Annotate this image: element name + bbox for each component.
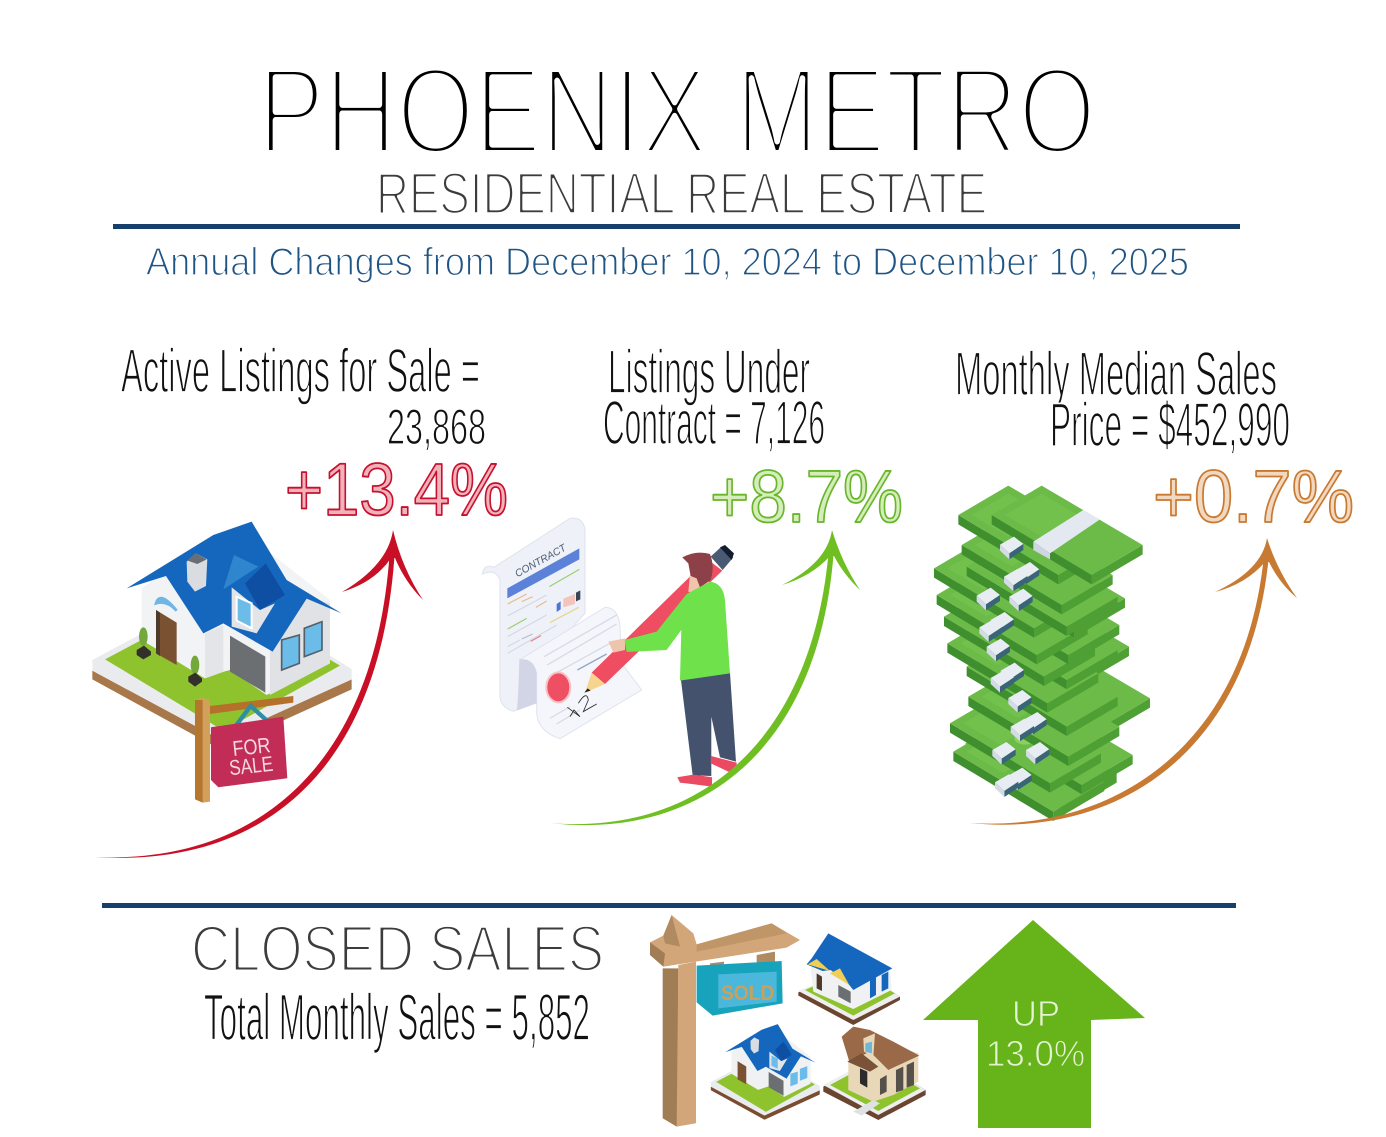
heading: active listings: 23,868 bbox=[387, 399, 486, 455]
heading: closed sales: CLOSED SALES bbox=[191, 912, 604, 985]
percent: +8.7%: +8.7% bbox=[710, 455, 903, 538]
arrow: green upward bbox=[550, 530, 860, 825]
heading: listings under contract bbox=[603, 338, 825, 458]
icon: sold sign with houses: SOLD bbox=[721, 981, 774, 1005]
icon: house with for sale sign: FOR bbox=[231, 733, 272, 761]
icon: house with for sale sign bbox=[92, 522, 352, 803]
panel: closed sales: Total Monthly Sales = 5,852 bbox=[204, 980, 590, 1054]
panel: closed sales bbox=[191, 912, 1145, 1128]
panel: listings under contract bbox=[482, 338, 903, 825]
heading: median sales price bbox=[955, 340, 1290, 460]
icon: stack of cash bbox=[934, 486, 1150, 821]
icon: person signing contract: CONTRACT bbox=[513, 543, 569, 580]
panel: listings under contract: Contract = 7,126 bbox=[603, 389, 825, 458]
arrow: orange upward bbox=[970, 538, 1297, 825]
arrow: up 13.0% bbox=[923, 920, 1145, 1128]
icon: house with for sale sign: SALE bbox=[228, 752, 274, 780]
percent: +13.4%: +13.4% bbox=[285, 448, 508, 531]
arrow: up 13.0%: UP bbox=[1012, 993, 1060, 1034]
icon: sold sign with houses bbox=[650, 915, 926, 1127]
heading: listings under contract: Listings Under bbox=[608, 338, 810, 407]
percent: +0.7%: +0.7% bbox=[1153, 455, 1354, 538]
arrow: red upward bbox=[95, 530, 423, 858]
heading: active listings bbox=[121, 337, 486, 455]
heading: active listings: Active Listings for Sale = bbox=[121, 337, 480, 406]
date range: Annual Changes from December 10, 2024 to December 10, 2025 bbox=[146, 241, 1189, 284]
panel: active listings bbox=[92, 337, 508, 858]
arrow: up 13.0%: 13.0% bbox=[986, 1033, 1085, 1074]
subtitle: RESIDENTIAL REAL ESTATE bbox=[376, 161, 987, 226]
icon: person signing contract bbox=[482, 518, 737, 787]
title: PHOENIX METRO bbox=[258, 44, 1096, 180]
panel: median sales price bbox=[934, 340, 1354, 825]
